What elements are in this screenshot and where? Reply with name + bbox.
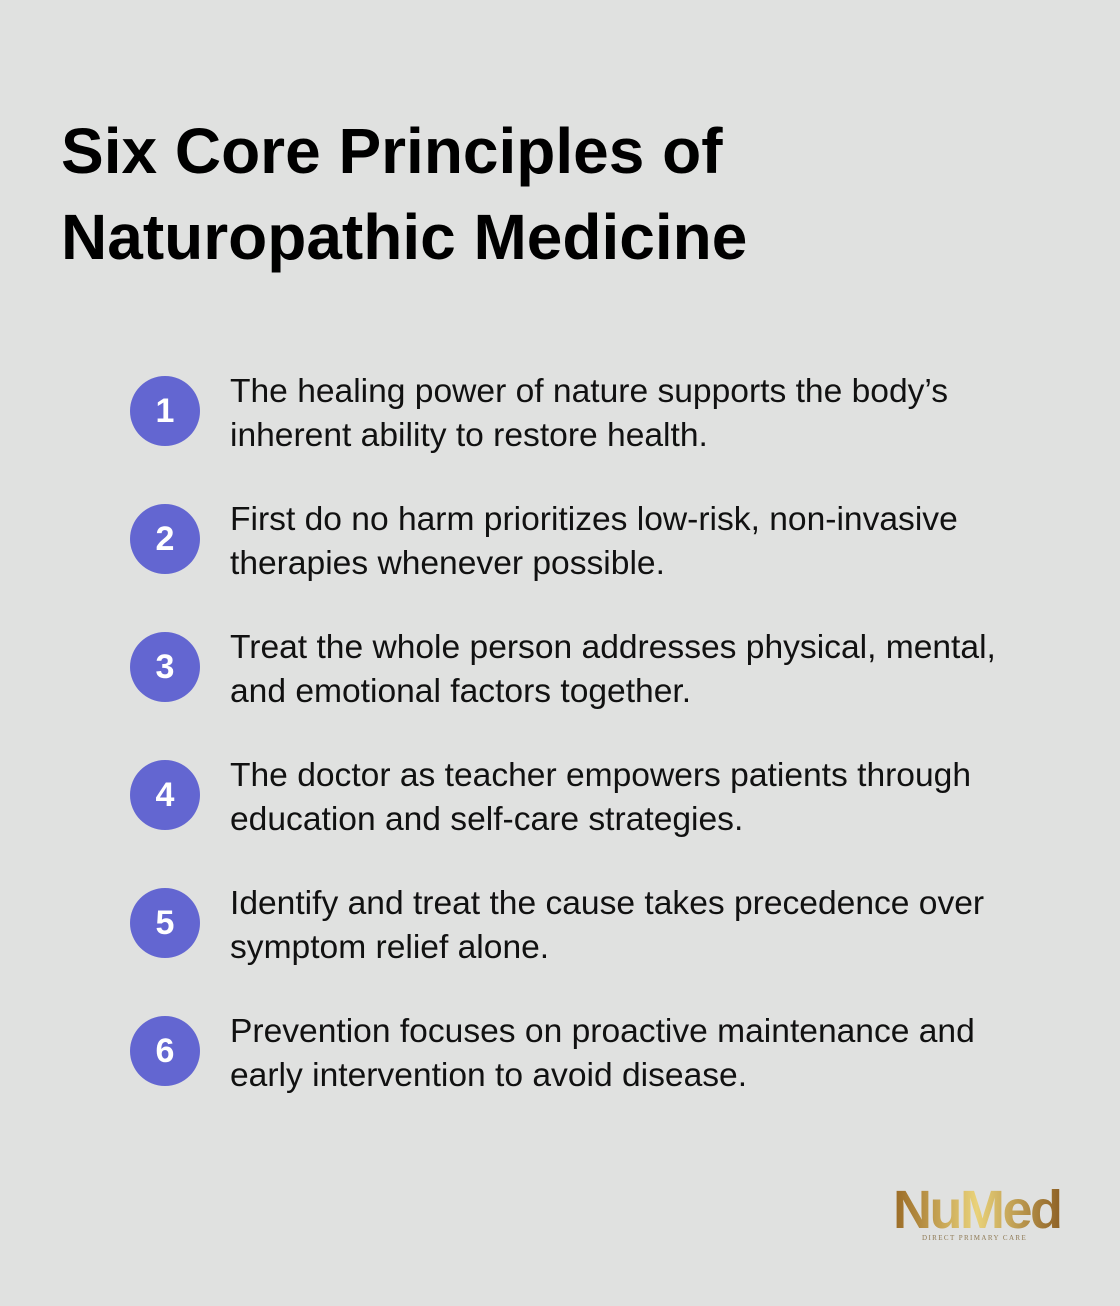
item 1: The healing power of nature supports the body’s	[230, 373, 948, 410]
title: Naturopathic Medicine	[61, 201, 747, 273]
item 1: inherent ability to restore health.	[230, 417, 708, 454]
item 2: therapies whenever possible.	[230, 545, 665, 582]
item 1: 1	[156, 392, 174, 430]
item 6: 6	[156, 1032, 174, 1070]
item 6: early intervention to avoid disease.	[230, 1057, 747, 1094]
item 4	[130, 757, 971, 838]
title: Six Core Principles of	[61, 115, 723, 187]
item 5: 5	[156, 904, 174, 942]
item 4: 4	[156, 776, 174, 814]
item 2: 2	[156, 520, 174, 558]
item 1	[130, 373, 948, 454]
logo: NuMed	[893, 1180, 1060, 1240]
item 4: education and self-care strategies.	[230, 801, 743, 838]
item 5: Identify and treat the cause takes precedence over	[230, 885, 984, 922]
item 6: Prevention focuses on proactive maintenance and	[230, 1013, 975, 1050]
item 3: and emotional factors together.	[230, 673, 691, 710]
item 3	[130, 629, 996, 710]
item 3: 3	[156, 648, 174, 686]
item 6	[130, 1013, 975, 1094]
title	[61, 115, 747, 273]
item 5: symptom relief alone.	[230, 929, 549, 966]
item 2: First do no harm prioritizes low-risk, non-invasive	[230, 501, 958, 538]
item 5	[130, 885, 984, 966]
item 2	[130, 501, 958, 582]
logo: DIRECT PRIMARY CARE	[922, 1234, 1027, 1242]
item 4: The doctor as teacher empowers patients through	[230, 757, 971, 794]
item 3: Treat the whole person addresses physical, mental,	[230, 629, 996, 666]
